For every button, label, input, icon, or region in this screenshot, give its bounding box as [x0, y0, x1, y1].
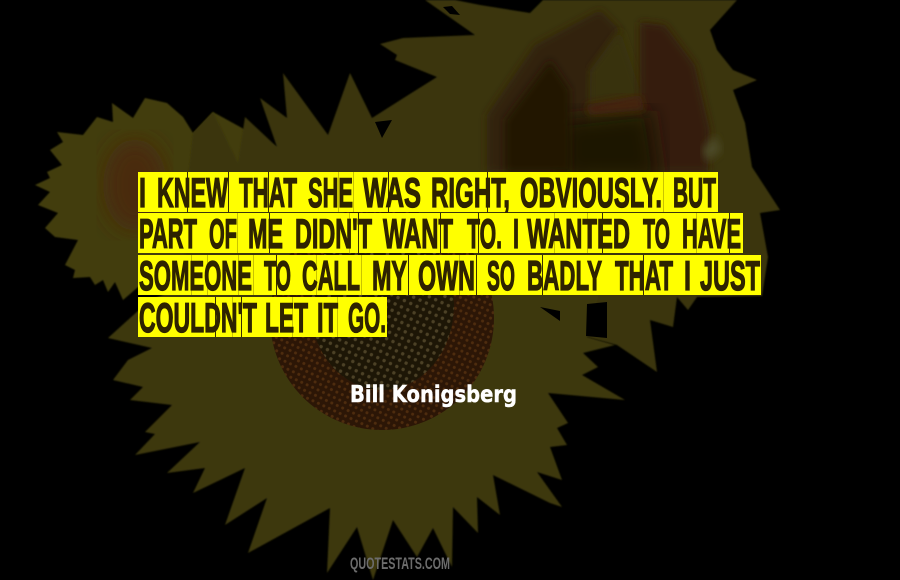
quote line 1: WAS [363, 169, 421, 216]
quote line 3: SOMEONE [139, 252, 252, 299]
quote line 3: BADLY [527, 252, 602, 299]
quote line 1: SHE [308, 169, 353, 216]
quote line 1: OBVIOUSLY. [520, 169, 662, 216]
main flower seed disc [270, 206, 494, 430]
quote line 3: CALL [302, 252, 360, 299]
quote text block [138, 169, 761, 341]
quote line 3: JUST [700, 252, 760, 299]
quote line 4: COULDN'T [139, 294, 257, 341]
quote line 4: GO. [348, 294, 386, 341]
upper flower seed head [487, 10, 722, 180]
quote line 2: PART [139, 210, 197, 257]
quote line 2: TO [643, 210, 670, 257]
quote line 2: OF [209, 210, 237, 257]
quote line 3: SO [487, 252, 515, 299]
left flower centre [103, 139, 167, 231]
main sunflower petals [108, 240, 625, 580]
upper sunflower petals [180, 0, 780, 372]
quote line 2: I [513, 210, 519, 257]
quote line 1: RIGHT, [431, 169, 510, 216]
quote line 2: TO. [467, 210, 502, 257]
author name: Bill Konigsberg [350, 382, 517, 408]
quote line 1: THAT [239, 169, 297, 216]
quote line 2: HAVE [682, 210, 741, 257]
quote line 3: I [684, 252, 691, 299]
watermark: QUOTESTATS.COM [350, 555, 450, 573]
quote line 3: OWN [418, 252, 475, 299]
quote line 1: BUT [673, 169, 716, 216]
left sunflower petals [35, 98, 300, 300]
quote line 2: WANTED [527, 210, 630, 257]
quote line 1: I [139, 169, 146, 216]
quote line 2: ME [248, 210, 283, 257]
quote line 3: MY [372, 252, 407, 299]
quote line 3: THAT [615, 252, 673, 299]
black gaps between petals [375, 6, 607, 338]
quote line 2: WANT [383, 210, 453, 257]
quote line 3: TO [264, 252, 291, 299]
quote line 1 [138, 169, 718, 216]
quote line 2: DIDN'T [295, 210, 372, 257]
quote line 1: KNEW [157, 169, 228, 216]
quote line 3 [138, 252, 761, 299]
quote line 2 [138, 210, 743, 257]
quote line 4: LET [265, 294, 308, 341]
quote line 4: IT [317, 294, 338, 341]
